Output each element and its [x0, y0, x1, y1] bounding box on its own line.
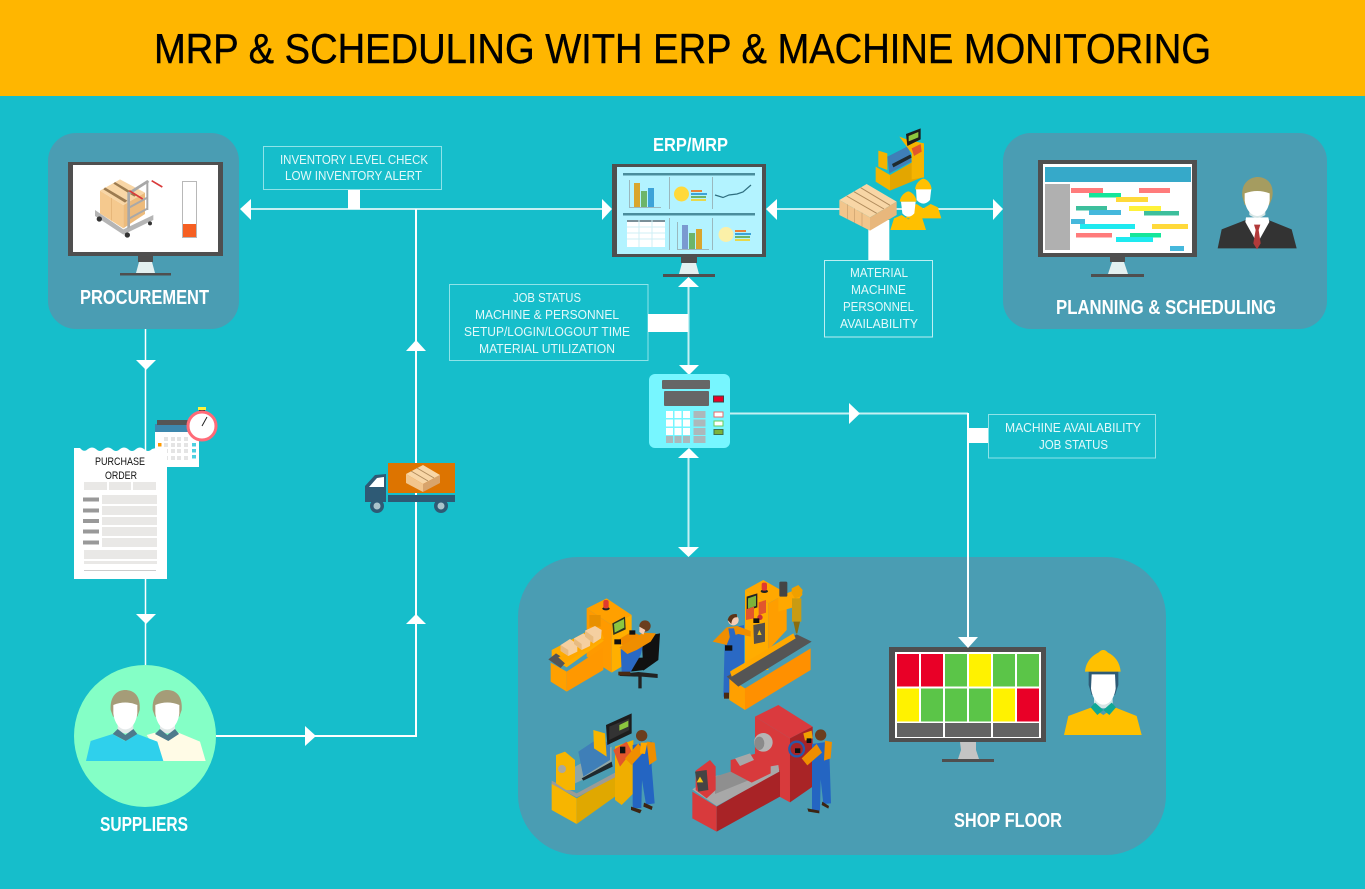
connector lines and arrows	[136, 199, 1003, 746]
heading: shop floor: SHOP FLOOR	[954, 810, 1062, 832]
callout: job status: MATERIAL UTILIZATION	[479, 341, 615, 356]
icon: supplier people	[86, 690, 206, 761]
icon: planner person	[1218, 177, 1297, 249]
callout: inventory alert: LOW INVENTORY ALERT	[285, 168, 422, 183]
icon: machine controller terminal	[649, 374, 730, 448]
callout: availability: MATERIAL	[850, 265, 908, 280]
panel: suppliers	[74, 665, 216, 836]
icon: cart with boxes	[95, 179, 162, 238]
icon: gantt monitor	[1038, 160, 1197, 277]
panel: procurement	[48, 133, 239, 329]
icon: red lathe with operator	[692, 705, 832, 832]
panel: shop floor	[518, 557, 1166, 855]
callout: job status: MACHINE & PERSONNEL	[475, 307, 619, 322]
icon: resources cluster of machine, material and workers	[839, 128, 941, 261]
icon: delivery truck	[365, 463, 455, 513]
callout: job status	[450, 284, 688, 360]
callout: machine availability: JOB STATUS	[1039, 437, 1108, 452]
callout: availability: AVAILABILITY	[840, 316, 918, 331]
callout: inventory alert: INVENTORY LEVEL CHECK	[280, 152, 428, 167]
title: MRP & SCHEDULING WITH ERP & MACHINE MONITORING	[154, 25, 1211, 72]
icon: purchase order document	[74, 448, 167, 579]
callout: job status: JOB STATUS	[513, 290, 581, 305]
icon: calendar and stopwatch	[155, 407, 216, 467]
icon: purchase order document: PURCHASE	[95, 456, 145, 468]
callout: inventory alert	[264, 146, 442, 209]
icon: ERP dashboard monitor	[612, 164, 766, 277]
icon: orange drill machine with operator	[713, 580, 812, 710]
callout: availability: PERSONNEL	[843, 299, 914, 314]
heading: ERP/MRP: ERP/MRP	[653, 135, 728, 155]
icon: yellow cutting machine with operator	[552, 713, 657, 824]
panel: planning and scheduling	[1003, 133, 1327, 329]
header banner	[0, 0, 1365, 96]
callout: availability: MACHINE	[851, 282, 906, 297]
icon: shop floor status monitor	[889, 647, 1046, 762]
heading: suppliers: SUPPLIERS	[100, 814, 188, 836]
callout: machine availability	[968, 414, 1156, 458]
callout: machine availability: MACHINE AVAILABILITY	[1005, 420, 1141, 435]
icon: shop floor worker	[1064, 650, 1142, 735]
icon: orange conveyor machine with seated operator	[548, 598, 660, 692]
heading: procurement: PROCUREMENT	[80, 287, 209, 309]
callout: job status: SETUP/LOGIN/LOGOUT TIME	[464, 324, 630, 339]
icon: procurement monitor	[68, 162, 223, 276]
heading: planning and scheduling: PLANNING & SCHEDULING	[1056, 297, 1276, 319]
icon: inventory gauge	[182, 182, 196, 238]
callout: availability	[824, 260, 932, 337]
icon: purchase order document: ORDER	[105, 470, 137, 482]
